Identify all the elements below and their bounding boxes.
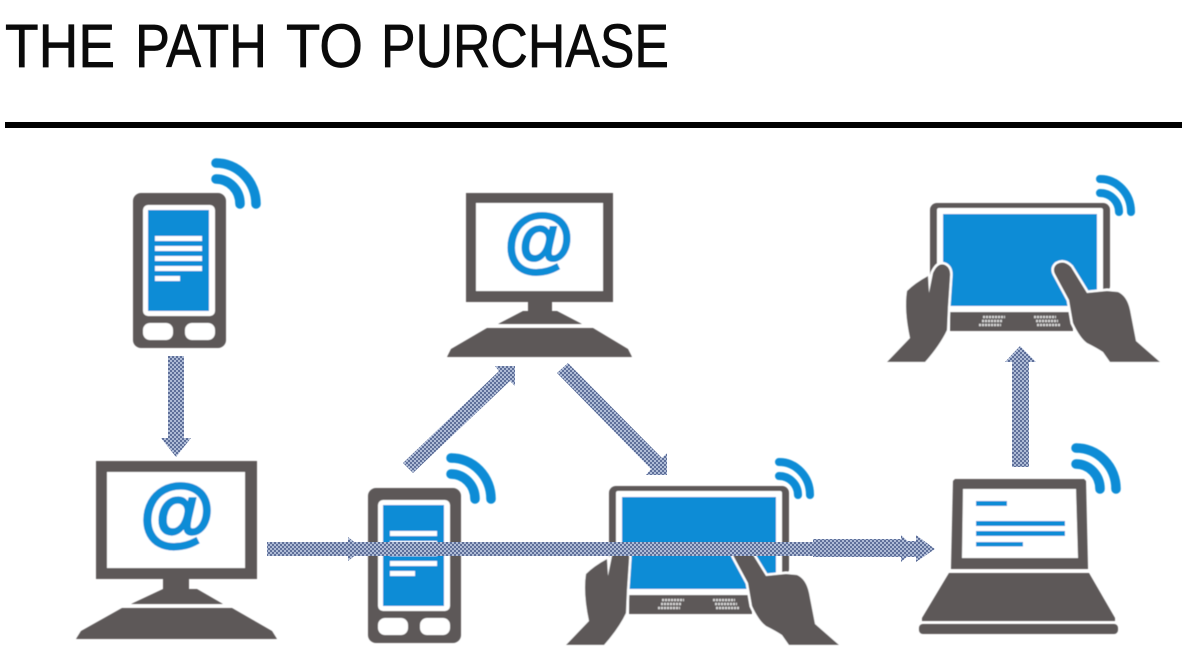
arrow: top monitor down to tablet (557, 363, 667, 475)
arrow: laptop up to tablet (1005, 346, 1036, 467)
arrow: bottom phone up to top monitor (403, 366, 515, 473)
title: PURCHASE (381, 12, 669, 80)
title: TO (286, 12, 363, 80)
title rule (5, 122, 1182, 128)
arrow: monitor across to laptop (267, 535, 935, 562)
title: THE (5, 12, 115, 80)
icon: laptop (919, 448, 1118, 634)
title: PATH (135, 12, 267, 80)
icon: tablet with hands top right (887, 179, 1160, 362)
arrow: phone down to monitor (161, 356, 191, 457)
icon: tablet with hands bottom centre (566, 462, 839, 645)
icon: desktop monitor top centre: @ (504, 200, 574, 280)
icon: desktop monitor bottom left (76, 461, 277, 639)
icon: smartphone top left (133, 163, 256, 348)
icon: smartphone bottom (368, 458, 491, 643)
icon: desktop monitor bottom left: @ (140, 470, 214, 554)
icon: desktop monitor top centre (447, 193, 632, 357)
title (5, 12, 669, 80)
